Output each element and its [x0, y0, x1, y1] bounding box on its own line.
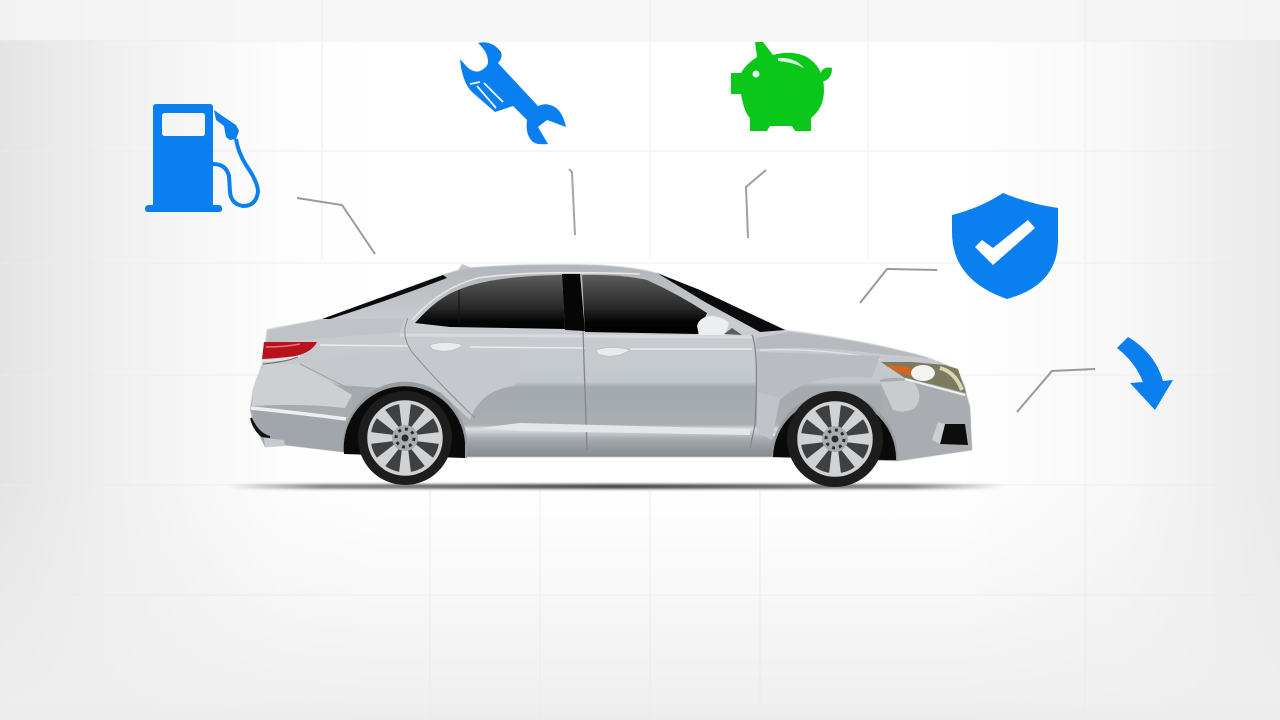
trunk highlight: [267, 318, 405, 343]
front bumper: [880, 378, 972, 461]
front wheel: [787, 391, 883, 487]
hood highlight: [756, 332, 930, 358]
icon: wrench: [460, 42, 566, 144]
fog lamp: [940, 424, 968, 445]
front wheel arch: [771, 393, 898, 460]
headlight: [881, 362, 966, 395]
rear window strip: [322, 275, 447, 319]
door seams: [405, 318, 475, 418]
icon: downward arrow: [1117, 337, 1173, 410]
rear exhaust cutout: [251, 418, 270, 437]
windshield strip: [657, 273, 785, 332]
ground shadow: [228, 484, 1003, 489]
front fender panel: [757, 352, 880, 400]
icon: shield with check: [952, 193, 1058, 299]
rear door window: [415, 275, 565, 329]
side mirror: [697, 316, 729, 335]
window frame highlight: [412, 273, 640, 320]
connector line: maintenance: [569, 169, 575, 235]
rear quarter light panel: [300, 350, 520, 420]
roof antenna: [458, 264, 472, 270]
connector line: insurance: [860, 269, 937, 303]
rear wheel arch: [343, 382, 467, 458]
car body: [250, 264, 972, 461]
rear bumper: [253, 408, 347, 452]
b pillar: [562, 274, 585, 331]
rear wheel: [358, 391, 452, 485]
icon: fuel pump: [145, 104, 258, 212]
connector line: depreciation: [1017, 369, 1095, 412]
car: [250, 264, 972, 487]
icon: piggy bank: [731, 42, 832, 131]
connector line: savings: [746, 170, 766, 238]
door handles: [430, 342, 463, 351]
front door window: [582, 275, 707, 334]
connector line: fuel: [297, 198, 375, 254]
tail light: [262, 342, 317, 364]
